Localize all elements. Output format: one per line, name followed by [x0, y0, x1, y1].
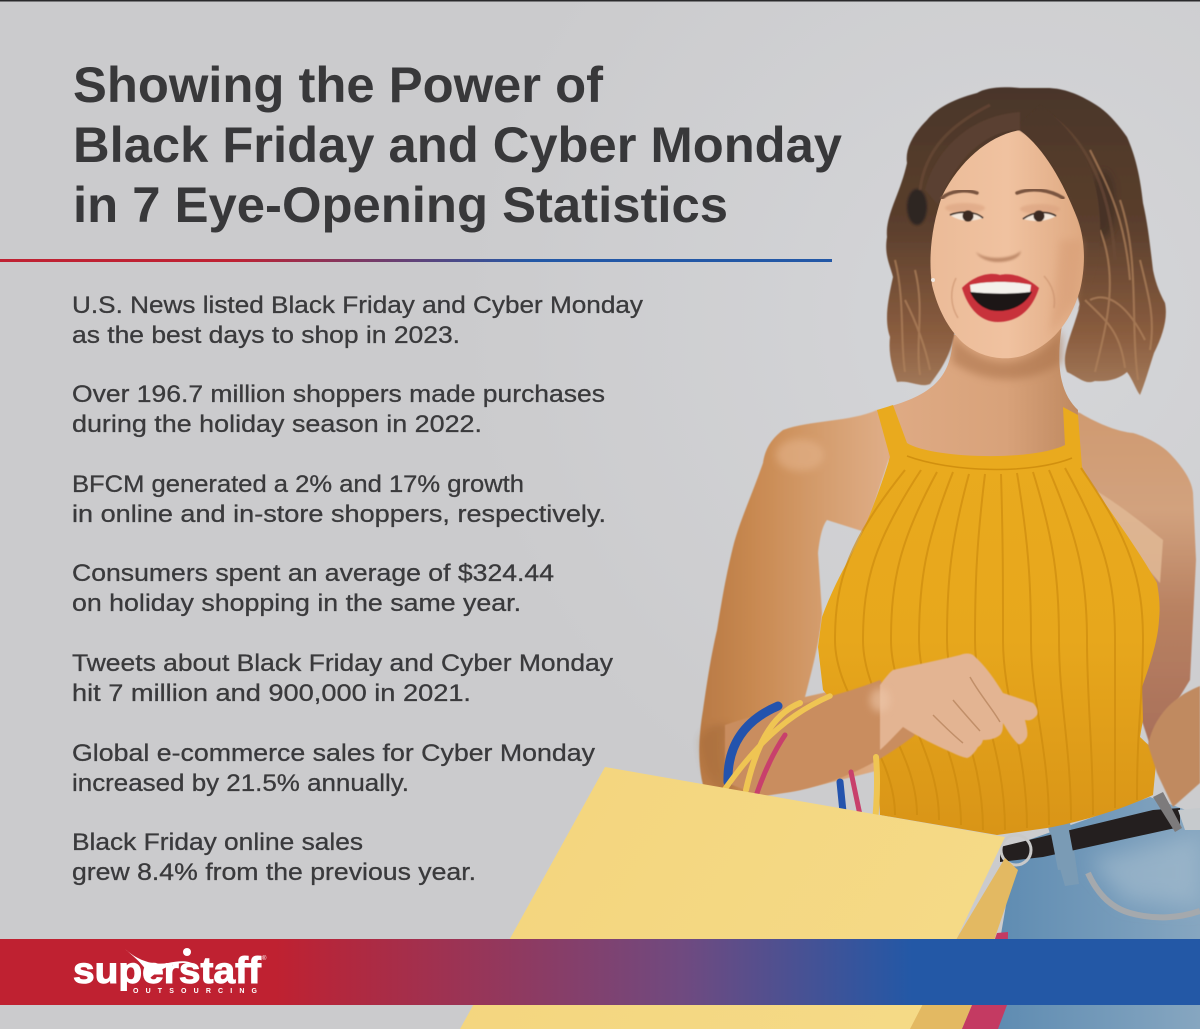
neckline band seam: [907, 456, 1072, 469]
eye shadow: [945, 203, 1060, 214]
hair fringe left: [925, 112, 1020, 205]
denim fade: [1090, 835, 1200, 905]
title: in 7 Eye-Opening Statistics: [73, 177, 728, 233]
buckle ring: [1001, 835, 1031, 865]
logo registered mark: ®: [262, 955, 267, 962]
statistics list: [72, 292, 643, 886]
right forearm at hip: [1148, 686, 1200, 807]
eye left: [950, 210, 983, 222]
top dark strands: [920, 105, 1115, 260]
cheek shading: [1050, 240, 1082, 335]
forearm: [725, 680, 915, 796]
photo: smiling woman with shopping bag: [460, 87, 1200, 1029]
stat 3: [72, 471, 606, 528]
pale chest side: [1095, 490, 1163, 583]
wrist shadow: [870, 688, 890, 712]
belt loop: [1048, 822, 1079, 886]
nose: [976, 251, 1021, 262]
logo: superstaff outsourcing: [73, 948, 267, 995]
stat 2: during the holiday season in 2022.: [72, 411, 482, 438]
stat 5: Tweets about Black Friday and Cyber Monday: [72, 650, 613, 677]
belt and buckle: [1000, 792, 1200, 870]
earring: [931, 278, 935, 282]
stat 7: grew 8.4% from the previous year.: [72, 859, 476, 886]
shoulder highlight: [776, 439, 824, 471]
divider gradient line: [0, 259, 832, 262]
stat 3: BFCM generated a 2% and 17% growth: [72, 471, 524, 498]
eye right: [1023, 210, 1056, 222]
belt tip: [1153, 792, 1182, 832]
metal strap: [1178, 808, 1200, 830]
woman: hair: [886, 87, 1166, 395]
light strands: [895, 150, 1152, 380]
pink bag: [962, 932, 1008, 1029]
right arm and shoulder skin: [1063, 407, 1196, 745]
stat 6: increased by 21.5% annually.: [72, 770, 409, 797]
pocket seam: [1088, 873, 1200, 917]
stat 5: [72, 650, 613, 707]
finger creases: [933, 677, 1000, 743]
smile lines: [952, 276, 1055, 318]
woman: face: [925, 105, 1100, 358]
paper shopping bag: [460, 767, 1018, 1029]
logo wordmark: superstaff: [73, 950, 262, 991]
rib lines: [835, 468, 1143, 830]
stat 2: Over 196.7 million shoppers made purchases: [72, 381, 605, 408]
logo tagline: OUTSOURCING: [133, 988, 258, 995]
stat 1: [72, 292, 643, 349]
footer banner: [0, 939, 1200, 1005]
stat 1: as the best days to shop in 2023.: [72, 322, 460, 349]
logo swoosh: [125, 949, 193, 978]
denim jeans: [962, 797, 1200, 1029]
hand: [870, 654, 1038, 758]
belt loop over belt: [1050, 825, 1076, 870]
dark hair right side: [1091, 171, 1115, 239]
stat 6: [72, 740, 595, 797]
left arm and shoulder: [699, 410, 900, 800]
stat 4: on holiday shopping in the same year.: [72, 590, 521, 617]
eyebrows: [942, 191, 977, 198]
stat 7: Black Friday online sales: [72, 829, 363, 856]
bag front: [460, 767, 1005, 1029]
title: Black Friday and Cyber Monday: [73, 117, 842, 173]
mouth: [962, 274, 1039, 322]
stat 4: Consumers spent an average of $324.44: [72, 560, 554, 587]
stat 5: hit 7 million and 900,000 in 2021.: [72, 680, 471, 707]
hair fringe right: [1015, 105, 1100, 310]
stat 3: in online and in-store shoppers, respectively.: [72, 501, 606, 528]
neck and chest skin: [885, 325, 1078, 480]
elbow crease: [700, 724, 735, 795]
stat 7: [72, 829, 476, 886]
stat 2: [72, 381, 605, 438]
stat 6: Global e-commerce sales for Cyber Monday: [72, 740, 595, 767]
stat 4: [72, 560, 554, 617]
neck shadow: [952, 330, 1062, 379]
bag gusset: [905, 858, 1018, 1029]
bag handles: [715, 696, 877, 832]
yellow ribbed tank top: [818, 405, 1160, 835]
title: Showing the Power of: [73, 57, 603, 113]
dark scrunchie area: [907, 189, 927, 225]
stat 1: U.S. News listed Black Friday and Cyber Monday: [72, 292, 643, 319]
logo dot: [183, 948, 191, 956]
title: [73, 57, 842, 233]
